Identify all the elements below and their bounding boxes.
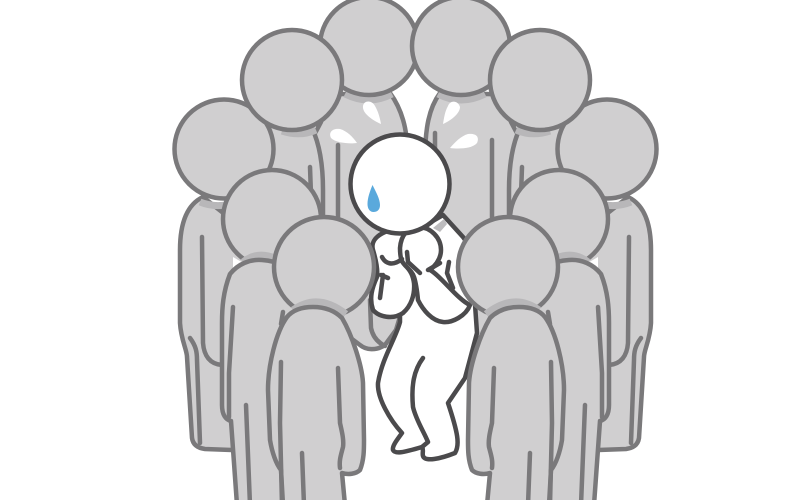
right arm and hand: [400, 227, 470, 322]
body: second row right: [509, 122, 567, 240]
person: front row right: [458, 217, 564, 500]
person: front row left: [268, 217, 374, 500]
person: back row left: [300, 0, 418, 349]
icon: sweat drop upper: [443, 102, 460, 124]
head: second row left: [242, 30, 342, 134]
person: fourth row left: [222, 170, 321, 500]
head: [350, 134, 450, 234]
finger lines: [380, 252, 453, 298]
inner leg line: [412, 358, 428, 447]
person: third row right: [558, 100, 656, 451]
body and legs: [378, 215, 477, 459]
person: crying centre figure: [350, 134, 477, 459]
icon: sweat drop upper: [363, 102, 381, 124]
icon: sweat drop lower: [330, 129, 357, 143]
person: fourth row right: [510, 170, 609, 500]
person: third row left: [174, 100, 274, 451]
head: second row right: [490, 30, 590, 134]
body: second row left: [265, 122, 323, 240]
icon: blue tear: [368, 185, 380, 212]
left arm and hand: [371, 230, 414, 317]
shadow under head: [433, 219, 447, 232]
icon: sweat drop lower: [450, 134, 478, 148]
person: back row right: [412, 0, 530, 349]
